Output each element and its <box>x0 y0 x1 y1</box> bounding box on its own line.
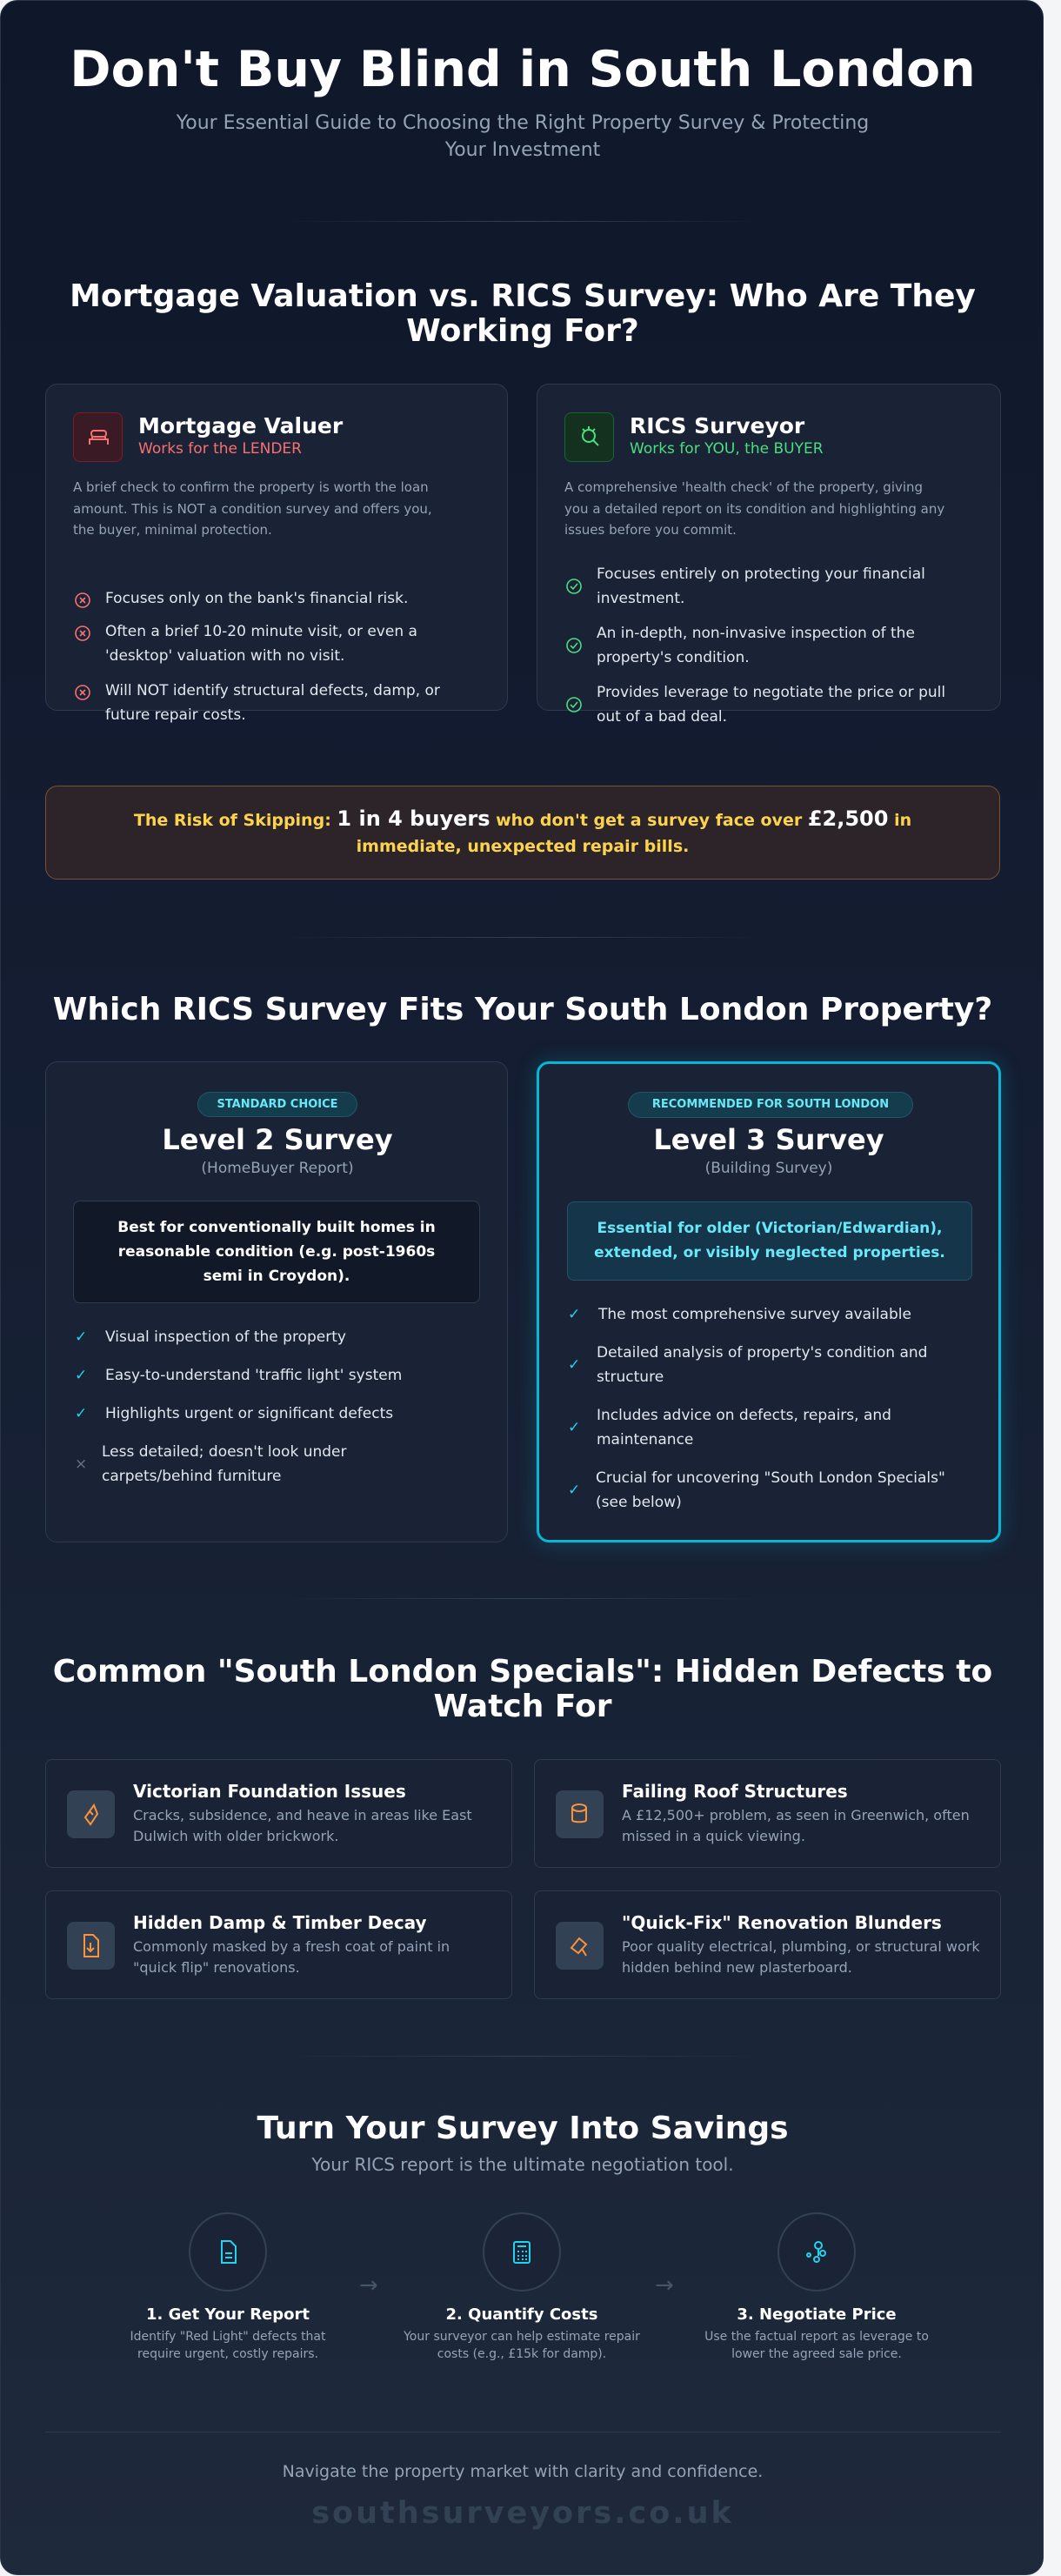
heading: mortgage valuer: Mortgage Valuer <box>138 413 343 438</box>
panel: level 2 survey <box>45 1061 508 1542</box>
list: level 3 features: Crucial for uncovering "South London Specials" (see below) <box>596 1469 945 1511</box>
badge: recommended <box>628 1092 913 1118</box>
text: description: A brief check to confirm the property is worth the loan amount. This is NOT a condition survey and offers you, the buyer, minimal protection. <box>73 479 432 538</box>
list: level 2 features: Less detailed; doesn't look under carpets/behind furniture <box>102 1443 346 1485</box>
icon: negotiate <box>777 2212 856 2292</box>
panel: roof structures <box>534 1759 1001 1868</box>
list: level 3 features: ✓ <box>568 1482 580 1499</box>
subtitle: Your Essential Guide to Choosing the Right Property Survey & Protecting Your Investment <box>177 112 869 161</box>
subtitle: negotiation tool: Your RICS report is the ultimate negotiation tool. <box>311 2154 734 2175</box>
step 3: 3. Negotiate Price <box>737 2305 897 2324</box>
text: description: A comprehensive 'health check' of the property, giving you a detailed report on its condition and highlighting any issues before you commit. <box>564 479 944 538</box>
icon: damp document <box>67 1922 115 1970</box>
icon: crack <box>67 1790 115 1838</box>
list: level 2 features: ✓ <box>75 1367 87 1384</box>
heading: valuation vs survey <box>70 278 976 349</box>
badge: recommended: RECOMMENDED FOR SOUTH LONDON <box>652 1098 889 1111</box>
icon: roof <box>556 1790 604 1838</box>
heading: level 2: Level 2 Survey <box>162 1123 393 1156</box>
text: best for box <box>73 1201 480 1303</box>
panel: mortgage valuer <box>45 384 508 711</box>
text: best for box: Best for conventionally built homes in reasonable condition (e.g. post-1960s semi in Croydon). <box>117 1219 436 1285</box>
icon: report <box>189 2212 267 2292</box>
list: level 3 features: ✓ <box>568 1419 580 1436</box>
panel: victorian foundation: Cracks, subsidence, and heave in areas like East Dulwich with older brickwork. <box>133 1807 472 1844</box>
heading: RICS surveyor: RICS Surveyor <box>630 413 804 438</box>
list: level 2 features: Highlights urgent or significant defects <box>105 1405 393 1422</box>
panel: quick-fix blunders: "Quick-Fix" Renovation Blunders <box>622 1912 942 1933</box>
panel: quick-fix blunders <box>534 1890 1001 1999</box>
panel: victorian foundation <box>45 1759 512 1868</box>
panel: level 2 survey: (HomeBuyer Report) <box>201 1160 354 1177</box>
footer text: Navigate the property market with clarity and confidence. <box>283 2462 763 2481</box>
list: level 2 features: ✓ <box>75 1405 87 1422</box>
step 1: Identify "Red Light" defects that require urgent, costly repairs. <box>130 2330 326 2361</box>
step 2 <box>404 2212 640 2361</box>
badge: standard choice <box>197 1092 357 1117</box>
footer domain: southsurveyors.co.uk <box>311 2496 734 2531</box>
arrow 2: → <box>655 2272 674 2298</box>
icon: surveyor <box>564 412 614 462</box>
list: level 2 features: × <box>75 1455 87 1473</box>
panel: roof structures: A £12,500+ problem, as seen in Greenwich, often missed in a quick viewing. <box>622 1807 970 1844</box>
list: surveyor pros: Focuses entirely on protecting your financial investment. <box>597 565 925 607</box>
arrow 1: → <box>359 2272 378 2298</box>
list: level 3 features: Detailed analysis of property's condition and structure <box>597 1344 927 1386</box>
list: level 2 features: ✓ <box>75 1328 87 1346</box>
callout: risk of skipping: immediate, unexpected repair bills. <box>357 837 689 856</box>
list: level 2 features: Easy-to-understand 'traffic light' system <box>105 1367 402 1384</box>
list: valuer cons: Will NOT identify structural defects, damp, or future repair costs. <box>105 682 440 724</box>
title: Don't Buy Blind in South London <box>70 41 976 98</box>
heading: level 3: Level 3 Survey <box>653 1123 884 1156</box>
list: surveyor pros: Provides leverage to negotiate the price or pull out of a bad deal. <box>597 684 945 726</box>
panel: hidden damp: Hidden Damp & Timber Decay <box>133 1912 427 1933</box>
heading: which survey: Which RICS Survey Fits Your South London Property? <box>53 992 992 1027</box>
list: level 3 features: ✓ <box>568 1306 580 1323</box>
list: level 2 features: Visual inspection of the property <box>105 1328 346 1346</box>
panel: hidden damp <box>45 1890 512 1999</box>
panel: victorian foundation: Victorian Foundation Issues <box>133 1781 406 1802</box>
list: level 3 features: Includes advice on defects, repairs, and maintenance <box>597 1407 891 1449</box>
panel: RICS surveyor <box>537 384 1001 711</box>
step 3: Use the factual report as leverage to lower the agreed sale price. <box>704 2330 929 2361</box>
step 1 <box>130 2212 326 2361</box>
callout: risk of skipping: The Risk of Skipping: 1 in 4 buyers who don't get a survey face over £2,500 in <box>134 806 911 831</box>
step 3 <box>704 2212 929 2361</box>
icon: lender <box>73 412 123 462</box>
heading: valuation vs survey: Mortgage Valuation vs. RICS Survey: Who Are They <box>70 278 976 314</box>
list: level 3 features: The most comprehensive survey available <box>598 1306 911 1323</box>
panel: RICS surveyor: Works for YOU, the BUYER <box>630 440 824 458</box>
callout: risk of skipping <box>45 786 1000 880</box>
step 2: 2. Quantify Costs <box>446 2305 597 2324</box>
panel: roof structures: Failing Roof Structures <box>622 1781 848 1802</box>
list: valuer cons <box>75 590 440 724</box>
badge: standard choice: STANDARD CHOICE <box>217 1098 338 1111</box>
list: valuer cons: Often a brief 10-20 minute visit, or even a 'desktop' valuation with no visit. <box>105 623 417 665</box>
text: essential for box <box>567 1201 972 1281</box>
icon: paint <box>556 1922 604 1970</box>
panel: hidden damp: Commonly masked by a fresh coat of paint in "quick flip" renovations. <box>133 1938 450 1976</box>
text: essential for box: Essential for older (Victorian/Edwardian), extended, or visibly neglected properties. <box>594 1220 945 1261</box>
panel: quick-fix blunders: Poor quality electrical, plumbing, or structural work hidden behind new plasterboard. <box>622 1938 980 1976</box>
panel: mortgage valuer: Works for the LENDER <box>138 440 302 458</box>
step 2: Your surveyor can help estimate repair costs (e.g., £15k for damp). <box>404 2330 640 2361</box>
step 1: 1. Get Your Report <box>146 2305 310 2324</box>
list: level 3 features <box>568 1306 945 1511</box>
icon: calculator <box>483 2212 561 2292</box>
heading: south london specials <box>53 1654 992 1724</box>
heading: valuation vs survey: Working For? <box>406 313 639 349</box>
heading: south london specials: Watch For <box>433 1689 612 1724</box>
panel: level 3 survey <box>537 1061 1001 1542</box>
list: valuer cons: Focuses only on the bank's financial risk. <box>105 590 408 607</box>
heading: south london specials: Common "South London Specials": Hidden Defects to <box>53 1654 992 1689</box>
heading: turn survey into savings: Turn Your Survey Into Savings <box>257 2111 789 2146</box>
list: level 3 features: ✓ <box>568 1356 580 1374</box>
list: level 2 features <box>75 1328 402 1485</box>
panel: level 3 survey: (Building Survey) <box>705 1160 832 1177</box>
list: surveyor pros: An in-depth, non-invasive inspection of the property's condition. <box>597 625 915 666</box>
list: surveyor pros <box>566 565 945 726</box>
